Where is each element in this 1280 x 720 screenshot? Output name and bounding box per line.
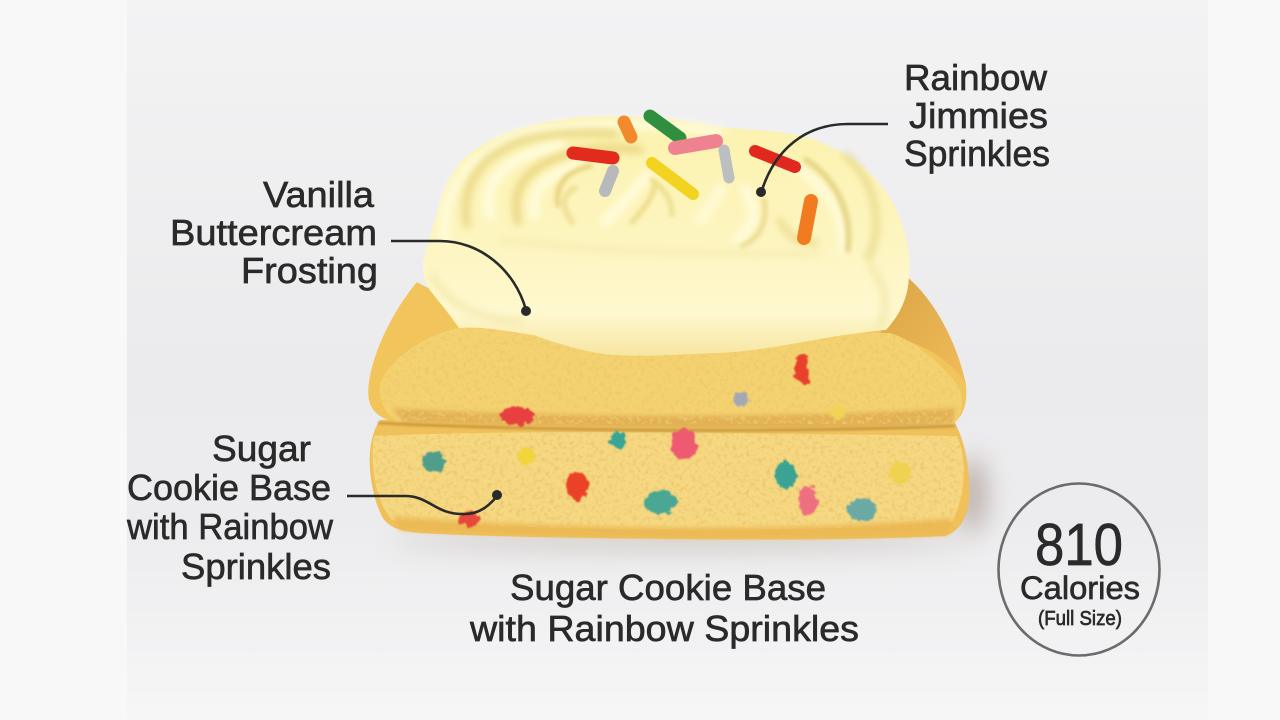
callout: vanilla buttercream frosting: Buttercream bbox=[170, 212, 377, 253]
rainbow jimmies sprinkles bbox=[573, 116, 811, 238]
callout: sugar cookie base: Cookie Base bbox=[127, 467, 331, 508]
vanilla buttercream frosting bbox=[423, 116, 909, 356]
callout: rainbow jimmies sprinkles: Sprinkles bbox=[904, 133, 1050, 174]
top cookie layer bbox=[368, 277, 970, 433]
calorie badge bbox=[998, 484, 1160, 656]
caption bbox=[469, 567, 859, 649]
caption: Sugar Cookie Base bbox=[510, 567, 826, 608]
calorie badge: Calories bbox=[1020, 570, 1140, 606]
calorie badge: (Full Size) bbox=[1038, 608, 1122, 630]
callout: vanilla buttercream frosting: Frosting bbox=[241, 250, 378, 291]
callout: vanilla buttercream frosting: Vanilla bbox=[263, 174, 375, 215]
shadow line between layers bbox=[378, 423, 955, 430]
bottom cookie layer bbox=[370, 419, 970, 543]
caption: with Rainbow Sprinkles bbox=[469, 608, 859, 649]
illustration: sugar cookie with frosting bbox=[368, 116, 970, 543]
callout: rainbow jimmies sprinkles bbox=[756, 57, 1050, 197]
frosting swirl highlights and creases bbox=[432, 124, 885, 325]
callout: rainbow jimmies sprinkles: Rainbow bbox=[904, 57, 1048, 98]
cookie rainbow specks bbox=[423, 355, 911, 527]
calorie badge: 810 bbox=[1035, 512, 1123, 578]
callout: sugar cookie base: with Rainbow bbox=[126, 506, 334, 547]
callout: sugar cookie base bbox=[126, 428, 502, 587]
cookie shadow bbox=[390, 457, 986, 550]
callout: vanilla buttercream frosting bbox=[170, 174, 531, 316]
callout: sugar cookie base: Sprinkles bbox=[181, 546, 331, 587]
callout: rainbow jimmies sprinkles: Jimmies bbox=[909, 95, 1048, 136]
callout: sugar cookie base: Sugar bbox=[212, 428, 311, 469]
